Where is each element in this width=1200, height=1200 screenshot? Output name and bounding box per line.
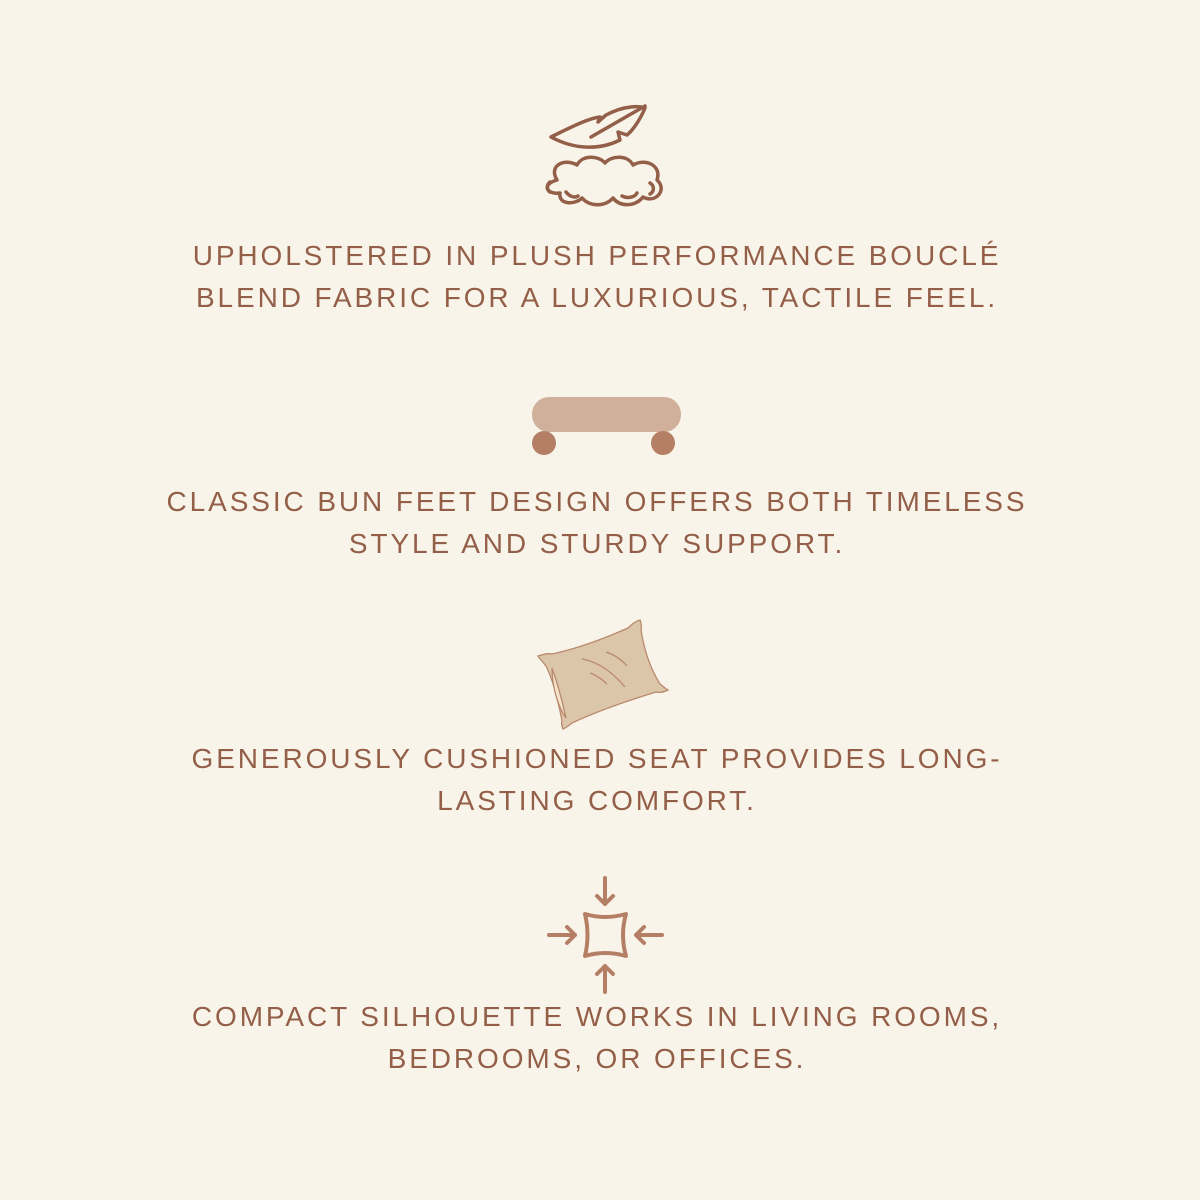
text: compact: BEDROOMS, OR OFFICES. <box>388 1043 806 1074</box>
text: cushioned: GENEROUSLY CUSHIONED SEAT PROVIDES LONG- <box>192 743 1002 774</box>
text: compact <box>192 1001 1002 1074</box>
text: bun feet: STYLE AND STURDY SUPPORT. <box>349 528 845 559</box>
text: bun feet <box>167 486 1027 559</box>
text: cushioned: LASTING COMFORT. <box>437 785 757 816</box>
text: cushioned <box>192 743 1002 816</box>
text: boucle <box>193 240 1001 313</box>
text: boucle: UPHOLSTERED IN PLUSH PERFORMANCE BOUCLÉ <box>193 240 1001 271</box>
text: bun feet: CLASSIC BUN FEET DESIGN OFFERS BOTH TIMELESS <box>167 486 1027 517</box>
text: compact: COMPACT SILHOUETTE WORKS IN LIVING ROOMS, <box>192 1001 1002 1032</box>
text: boucle: BLEND FABRIC FOR A LUXURIOUS, TACTILE FEEL. <box>196 282 998 313</box>
